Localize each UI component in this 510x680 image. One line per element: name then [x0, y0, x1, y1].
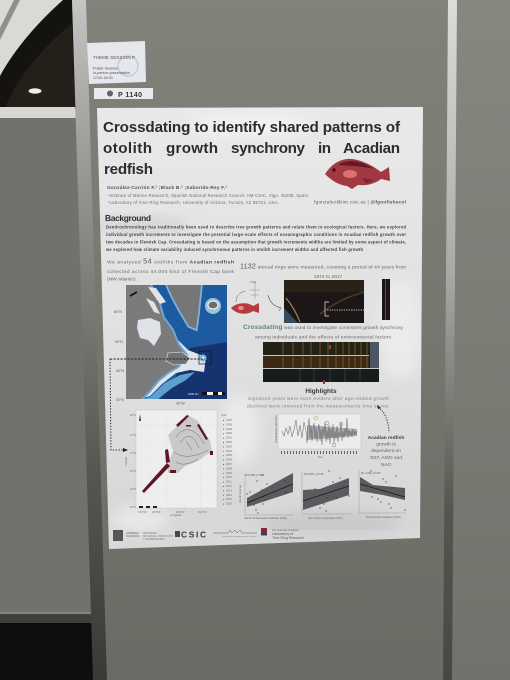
map axis labels	[114, 310, 185, 406]
logo: Laboratory of Tree-Ring Research: Tree-Ring Research	[272, 536, 304, 540]
logo: Laboratory of Tree-Ring Research: Laboratory of	[272, 532, 293, 536]
legend: sampling years: 2008	[226, 466, 232, 470]
logo: Spanish government	[113, 530, 173, 541]
callout: redfish growth dependence: SST, AMO and	[370, 455, 402, 461]
map: North Atlantic	[114, 285, 227, 406]
text: annual rings: 1132 annual rings were measured, covering a period of 44 years from	[240, 262, 406, 270]
title: redfish	[104, 161, 153, 178]
legend: sampling years: 1999	[226, 427, 232, 431]
legend: sampling years: Year	[221, 413, 227, 417]
chart: growth vs NAO: R= -0.08, p<0.05	[361, 471, 381, 475]
legend: sampling years: 2011	[226, 480, 232, 484]
logo: Spanish government: Y UNIVERSIDADES	[143, 538, 165, 541]
contact: fgonzalez@iim.csic.es | @fgonfishecol	[314, 200, 406, 204]
legend: sampling years: 2012	[226, 484, 232, 488]
background paragraph: individual growth increments to investigate the potential large-scale effects of oceanographic conditions in Acadian redfish growth over	[106, 232, 406, 237]
logo: CSIC: CSIC	[181, 530, 206, 540]
legend: sampling years: 2014	[226, 493, 232, 497]
logo: Spanish government: DE ESPAÑA	[126, 535, 140, 538]
map 2 axis labels: 46°N	[130, 487, 136, 491]
map axis labels: 50°N	[115, 340, 123, 344]
logo: Laboratory of Tree-Ring Research: The University of Arizona	[272, 529, 299, 532]
map 2 axis labels: 47°N	[130, 433, 136, 437]
text: sampling summary: (NW Atlantic).	[107, 276, 137, 282]
map: Flemish Cap sampling	[124, 410, 217, 517]
legend: sampling years: 2002	[226, 440, 232, 444]
text: crossdating: Crossdating was used to investigate consistent growth synchrony	[243, 324, 404, 331]
title: growth	[166, 140, 218, 157]
session card: THEME SESSION P	[93, 55, 135, 60]
map 2 axis labels: 48°N	[130, 413, 136, 417]
text: crossdating: among individuals and the effects of environmental factors	[255, 334, 392, 340]
logo: Spanish government: MINISTERIO	[143, 532, 157, 535]
legend: sampling years: 2010	[226, 475, 232, 479]
session card: 17:00-18:00	[93, 76, 113, 80]
callout: redfish growth dependence: dependent on	[371, 448, 401, 454]
map 2 axis labels: Longitude	[170, 513, 182, 517]
chart: growth vs AMO: Growth anomaly	[239, 484, 242, 503]
map 2 axis labels: 46.5°W	[152, 510, 161, 514]
legend: sampling years: 2016	[226, 502, 232, 506]
logo: instituto line mark	[213, 530, 258, 538]
map axis labels: 40°W	[176, 402, 185, 406]
heading: highlights: Highlights	[305, 388, 337, 395]
chart: growth vs SST: Sea surface temperature (SST)	[308, 517, 343, 520]
legend: sampling years: 2001	[226, 436, 232, 440]
legend: sampling years: 2003	[226, 444, 232, 448]
map 2 axis labels	[124, 413, 207, 517]
map 2 axis labels: 45°N	[130, 505, 136, 509]
logo: Spanish government: GOBIERNO	[126, 532, 139, 535]
affiliations: ¹Institute of Marine Research, Spanish National Research Council, IIM-CSIC, Vigo, 36208, Spain	[108, 193, 309, 198]
session card: Poster Session	[93, 66, 118, 70]
callout: redfish growth dependence: NAO	[381, 462, 391, 468]
background paragraph: we explored how climate variability induced synchronous patterns in otolith increment widths and affected fish growth	[105, 247, 363, 252]
logo: Spanish government: DE CIENCIA, INNOVACIÓN	[143, 535, 173, 538]
chart: ring width time series: Year	[317, 455, 323, 459]
chart: growth vs NAO	[359, 470, 406, 519]
chart: growth vs AMO: Atlantic Multidecadal Oscillation (AMO)	[244, 517, 287, 520]
map 2 axis labels: 47.0°W	[138, 510, 147, 514]
crossdated otolith strips	[263, 342, 379, 384]
text: sampling summary: collected across 44.000 km2 of Flemish Cap bank	[107, 269, 235, 275]
affiliations	[108, 193, 309, 205]
text: annual rings	[240, 262, 406, 280]
callout: redfish growth dependence: Acadian redfish	[368, 435, 404, 441]
session card: In-person presentation	[93, 71, 130, 75]
map axis labels: 30°N	[116, 398, 124, 402]
legend: sampling years: 2006	[226, 458, 232, 462]
chart: growth vs AMO	[239, 473, 294, 520]
chart: ring width time series: Standardized width index	[275, 414, 278, 443]
legend: sampling years: 2000	[226, 431, 232, 435]
map 2 axis labels: 46°N	[130, 469, 136, 473]
legend: sampling years: 1997	[226, 418, 232, 422]
icon: small redfish with otolith diagram: L W D	[250, 281, 257, 284]
background paragraph	[105, 224, 406, 252]
title: Crossdating to identify shared patterns of	[103, 119, 401, 136]
text: highlights	[247, 396, 390, 408]
icon: redfish illustration	[325, 159, 390, 189]
callout: redfish growth dependence	[368, 435, 404, 468]
arrow: dashed link from map to study area	[110, 359, 205, 452]
legend: sampling years: 1998	[226, 422, 232, 426]
icon: small redfish with otolith diagram	[231, 281, 281, 314]
text: highlights: declined were removed from the measurements time series.	[247, 404, 390, 408]
logos row	[113, 528, 304, 541]
text: annual rings: 1974 to 2017	[314, 274, 343, 280]
chart: growth vs NAO: North Atlantic Oscillation (NAO)	[366, 516, 401, 519]
legend: sampling years	[221, 413, 232, 506]
logo: University of Arizona	[261, 528, 267, 535]
arrow: curved link to growth statement	[377, 405, 389, 431]
chart: ring width time series	[275, 414, 361, 459]
affiliations: ²Laboratory of Tree Ring Research, University of Arizona, Tucson, AZ 85701, USA.	[108, 200, 279, 205]
poster	[90, 107, 427, 552]
title	[103, 119, 401, 178]
legend: sampling years: 2004	[226, 449, 232, 453]
chart: growth vs SST: R=0.205, p<0.05	[304, 472, 324, 476]
chart: growth vs SST	[302, 470, 351, 520]
authors: González-Carrión F.¹ ;Black B.² ;Saborido-Rey F.¹	[107, 185, 227, 190]
title: synchrony	[231, 140, 306, 157]
chart: growth vs AMO: R=0.205, p<0.01	[245, 473, 265, 477]
left aluminium pole	[72, 0, 107, 680]
map: North Atlantic: 1000 km	[188, 392, 199, 396]
poster number label	[94, 88, 153, 99]
legend: sampling years: 2005	[226, 453, 232, 457]
map 2 axis labels: 45.0°W	[198, 510, 207, 514]
logo: instituto line mark: Instituto de Investigaciones Marinas	[222, 535, 258, 538]
heading: background: Background	[105, 213, 151, 223]
legend: sampling years: 2015	[226, 497, 232, 501]
poster number label: P 1140	[118, 92, 142, 99]
session card	[87, 41, 146, 84]
map 2 axis labels: 47°N	[130, 451, 136, 455]
background paragraph: Dendrochronology has traditionally been used to describe tree growth patterns and relate them to ecological factors. Here, we explored	[106, 224, 406, 230]
map axis labels: 80°N	[114, 310, 122, 314]
text: sampling summary	[107, 256, 235, 282]
title: in	[318, 140, 331, 157]
logo: Laboratory of Tree-Ring Research	[272, 529, 304, 540]
legend: sampling years: 2007	[226, 462, 232, 466]
text: sampling summary: We analyzed 54 otoliths from Acadian redfish	[107, 256, 234, 266]
map 2 axis labels: Latitude	[124, 456, 128, 466]
map axis labels: 40°N	[116, 369, 124, 373]
text: highlights: Signature years were more evident after age-related growth	[248, 396, 389, 401]
map 2 axis labels: 46.0°W	[176, 510, 185, 514]
right aluminium pole	[443, 0, 457, 680]
text: crossdating	[243, 324, 404, 340]
legend: sampling years: 2013	[226, 488, 232, 492]
legend: sampling years: 2009	[226, 471, 232, 475]
title: Acadian	[343, 140, 400, 157]
background paragraph: two decades in Flemish Cap. Crossdating is based on the assumption that growth increments widths are limited by some aspect of climate,	[106, 240, 406, 244]
otolith micrograph	[284, 279, 390, 323]
title: otolith	[103, 140, 152, 157]
callout: redfish growth dependence: growth is	[376, 442, 396, 448]
